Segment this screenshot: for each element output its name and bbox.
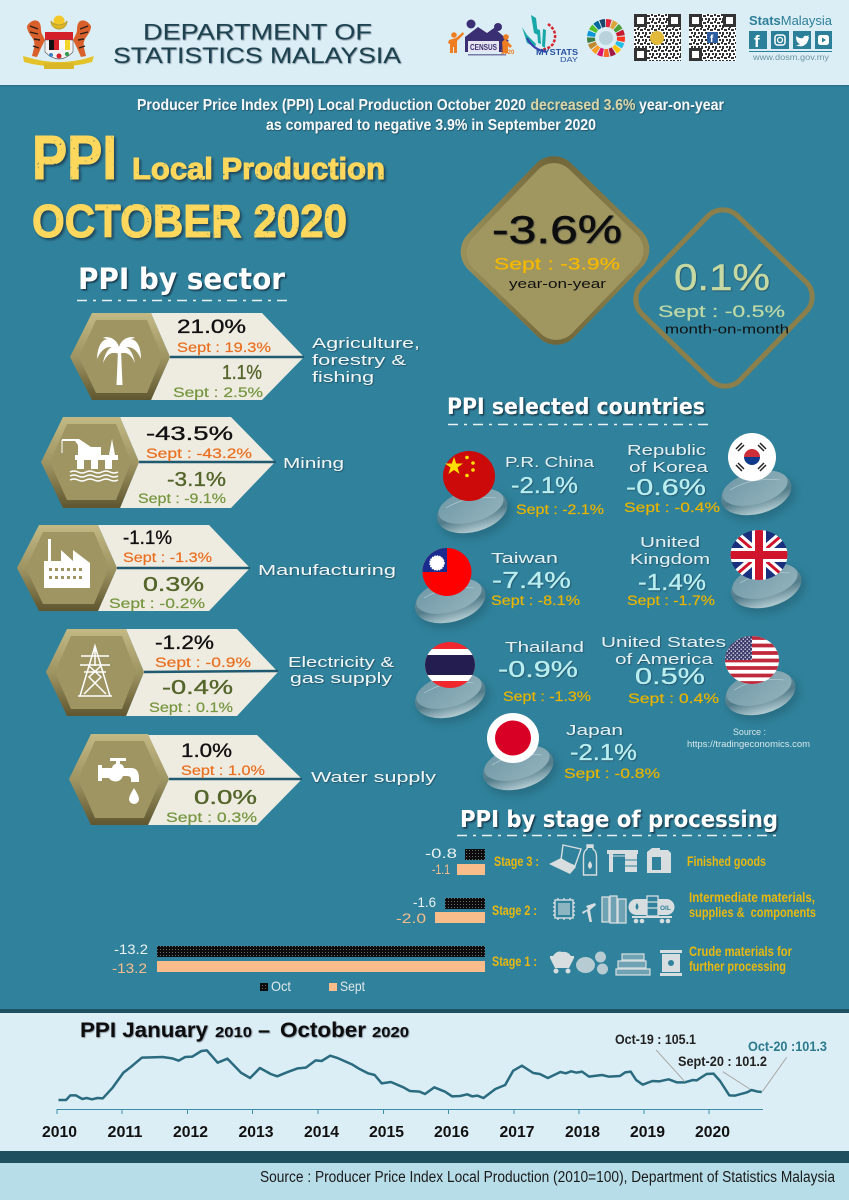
agriculture label: forestry & xyxy=(312,352,406,369)
hexagon and tap icon xyxy=(69,734,302,825)
x axis xyxy=(57,1109,763,1114)
water values: Sept : 0.3% xyxy=(166,810,257,825)
country: taiwan: Taiwan xyxy=(491,550,558,567)
mining values: Sept : -9.1% xyxy=(138,491,226,506)
flag: china xyxy=(443,451,495,501)
statsmalaysia social block: www.dosm.gov.my xyxy=(752,52,830,62)
manufacturing label: Manufacturing xyxy=(258,562,396,579)
year labels: 2011 xyxy=(108,1124,143,1141)
chart annotations: Oct-19 : 105.1 xyxy=(615,1031,696,1047)
agriculture values: 21.0% xyxy=(177,317,246,338)
legend xyxy=(260,978,365,994)
header title: DEPARTMENT OF xyxy=(143,20,372,44)
statsmalaysia social block xyxy=(749,13,833,62)
main title xyxy=(32,124,385,247)
year labels: 2012 xyxy=(173,1124,208,1141)
logo: mystats day: MYSTATS xyxy=(536,47,578,57)
country: taiwan: -7.4% xyxy=(492,567,571,593)
diamond: month-on-month: month-on-month xyxy=(665,322,789,336)
stage labels: Stage 3 : xyxy=(494,854,539,869)
stage labels: Crude materials for xyxy=(689,944,793,959)
icons: stage 1 crude materials xyxy=(550,950,682,976)
agriculture values: 1.1% xyxy=(222,362,262,384)
country: united kingdom xyxy=(628,530,807,615)
year labels: 2016 xyxy=(434,1124,469,1141)
electricity values: -0.4% xyxy=(162,677,233,699)
stage labels: Stage 1 : xyxy=(492,954,537,969)
chart title: 2020 xyxy=(372,1025,409,1041)
ppi line xyxy=(58,1050,787,1100)
diamond: year-on-year: Sept : -3.9% xyxy=(494,254,620,274)
electricity values: -1.2% xyxy=(155,633,214,654)
electricity label xyxy=(288,654,394,687)
bar chart: stage of processing: -13.2 xyxy=(114,942,148,957)
logo: sdg wheel xyxy=(591,23,621,53)
country: china: Sept : -2.1% xyxy=(516,502,604,517)
country: taiwan xyxy=(415,548,580,630)
country: china: P.R. China xyxy=(505,454,595,471)
chart annotations xyxy=(615,1031,827,1069)
hexagon and palm icon xyxy=(70,313,304,400)
country: thailand: Thailand xyxy=(505,639,584,656)
country: taiwan: Sept : -8.1% xyxy=(491,593,580,608)
flag: united states xyxy=(724,636,780,684)
country: korea: Republic xyxy=(627,442,707,459)
bar chart: stage of processing: -1.6 xyxy=(413,895,436,910)
bar chart: stage of processing: -0.8 xyxy=(425,846,457,861)
country: japan xyxy=(478,713,660,803)
country: united kingdom: United xyxy=(640,534,700,551)
icons: stage 2 intermediate materials: OIL xyxy=(660,905,671,912)
flag: japan xyxy=(487,713,539,763)
country: korea: -0.6% xyxy=(626,474,706,500)
water values: Sept : 1.0% xyxy=(181,763,265,778)
manufacturing values: 0.3% xyxy=(143,574,204,596)
country: united states: Sept : 0.4% xyxy=(628,691,719,706)
diamond: year-on-year: -3.6% xyxy=(492,209,622,252)
hexagon and oil rig icon xyxy=(41,417,276,508)
agriculture label xyxy=(312,335,420,386)
country: japan: -2.1% xyxy=(570,739,637,765)
country: korea: Sept : -0.4% xyxy=(624,500,720,515)
flag: united kingdom xyxy=(730,530,788,580)
year labels: 2018 xyxy=(565,1124,600,1141)
country: united kingdom: Sept : -1.7% xyxy=(627,593,715,608)
agriculture values: Sept : 19.3% xyxy=(177,340,271,355)
country: united kingdom: Kingdom xyxy=(630,551,710,568)
country: thailand: Sept : -1.3% xyxy=(503,689,591,704)
intro statement: year-on-year xyxy=(639,97,724,114)
logo: census 2020: CENSUS xyxy=(470,43,498,52)
water values xyxy=(166,741,265,825)
main title: OCTOBER 2020 xyxy=(32,195,347,247)
mining values: Sept : -43.2% xyxy=(146,446,252,461)
mining values: -43.5% xyxy=(146,424,233,445)
countries source note: https://tradingeconomics.com xyxy=(687,739,810,750)
heading: ppi selected countries: PPI selected countries xyxy=(447,395,705,420)
country: china xyxy=(432,451,604,546)
stage labels: further processing xyxy=(689,959,786,974)
manufacturing values: -1.1% xyxy=(123,528,172,549)
intro statement: decreased 3.6% xyxy=(530,97,636,114)
sector: manufacturing xyxy=(17,525,396,611)
hexagon and factory icon xyxy=(17,525,250,611)
year labels: 2017 xyxy=(500,1124,534,1141)
diamond: month-on-month xyxy=(627,201,821,395)
year labels: 2014 xyxy=(304,1124,339,1141)
stage labels: supplies & components xyxy=(689,905,816,920)
year labels xyxy=(42,1124,730,1141)
icon: coat of arms xyxy=(23,16,94,69)
chart title: – xyxy=(258,1019,270,1042)
panel: line chart xyxy=(0,1013,849,1151)
main title: PPI xyxy=(32,124,117,193)
country: thailand: -0.9% xyxy=(498,656,578,682)
statsmalaysia social block: f xyxy=(754,32,760,51)
logo: census 2020 xyxy=(448,20,515,56)
dark strip above chart xyxy=(0,1009,849,1013)
electricity values: Sept : 0.1% xyxy=(149,700,233,715)
year labels: 2015 xyxy=(369,1124,404,1141)
qr code 1 xyxy=(634,14,681,61)
agriculture label: fishing xyxy=(312,369,374,386)
header title: STATISTICS MALAYSIA xyxy=(113,43,401,68)
hexagon and pylon icon xyxy=(46,629,278,716)
manufacturing values: Sept : -0.2% xyxy=(109,596,205,611)
sector: water xyxy=(69,734,437,825)
legend: Sept xyxy=(340,978,365,994)
mining label: Mining xyxy=(283,455,344,472)
country: japan: Sept : -0.8% xyxy=(564,766,660,781)
chart title xyxy=(80,1019,409,1042)
chart title: 2010 xyxy=(215,1025,252,1041)
header band xyxy=(0,0,849,86)
year labels: 2013 xyxy=(238,1124,274,1141)
electricity values: Sept : -0.9% xyxy=(155,655,251,670)
header title xyxy=(113,20,401,68)
diamond: month-on-month: 0.1% xyxy=(674,257,770,298)
electricity label: gas supply xyxy=(290,670,393,687)
electricity values xyxy=(149,633,251,715)
statsmalaysia social block: StatsMalaysia xyxy=(749,13,833,28)
countries source note xyxy=(687,727,810,750)
qr code 2: f xyxy=(710,34,714,45)
country: united states: United States xyxy=(601,634,726,651)
diamond: month-on-month: Sept : -0.5% xyxy=(658,302,785,321)
bar chart: stage of processing: -1.1 xyxy=(432,862,450,877)
logo: mystats day xyxy=(522,15,578,64)
dark strip below chart xyxy=(0,1151,849,1163)
water label: Water supply xyxy=(311,769,437,786)
icons: stage 3 finished goods xyxy=(549,845,671,875)
country: united states xyxy=(602,636,801,722)
flag: taiwan xyxy=(422,548,472,596)
intro statement: as compared to negative 3.9% in September 2020 xyxy=(266,117,596,134)
countries source note: Source : xyxy=(733,727,766,738)
chart annotations: Sept-20 : 101.2 xyxy=(678,1053,767,1069)
year labels: 2019 xyxy=(630,1124,665,1141)
agriculture values xyxy=(173,317,271,400)
country: china: -2.1% xyxy=(511,472,578,498)
logo: census 2020: 2020 xyxy=(501,50,515,56)
year labels: 2020 xyxy=(695,1124,730,1141)
year labels: 2010 xyxy=(42,1124,77,1141)
country: thailand xyxy=(415,641,590,725)
chart title: PPI January xyxy=(80,1019,208,1042)
stage labels: Finished goods xyxy=(687,854,766,869)
country: japan: Japan xyxy=(566,722,623,739)
country: united states: of America xyxy=(615,651,714,668)
chart annotations: Oct-20 :101.3 xyxy=(748,1038,827,1054)
heading: ppi by stage of processing: PPI by stage of processing xyxy=(460,807,778,833)
intro statement xyxy=(137,97,724,134)
flag: korea xyxy=(728,433,776,481)
water values: 0.0% xyxy=(194,787,257,809)
chart title: October xyxy=(280,1019,366,1042)
diamond: year-on-year xyxy=(450,146,660,355)
mining values xyxy=(138,424,252,506)
agriculture values: Sept : 2.5% xyxy=(173,385,263,400)
heading: ppi by sector: PPI by sector xyxy=(78,262,286,296)
bar chart: stage of processing: -13.2 xyxy=(112,961,147,976)
agriculture label: Agriculture, xyxy=(312,335,420,352)
water values: 1.0% xyxy=(181,741,232,762)
sector: mining xyxy=(41,417,344,508)
country: korea xyxy=(624,433,801,528)
intro statement: Producer Price Index (PPI) Local Production October 2020 xyxy=(137,97,526,114)
footer source xyxy=(0,1163,849,1200)
mining values: -3.1% xyxy=(167,469,226,491)
flag: thailand xyxy=(424,641,476,689)
manufacturing values: Sept : -1.3% xyxy=(123,550,212,565)
stage labels: Stage 2 : xyxy=(492,903,537,918)
country: united states: 0.5% xyxy=(635,663,705,689)
bar chart: stage of processing xyxy=(112,846,485,994)
bar chart: stage of processing: -2.0 xyxy=(396,911,426,926)
country: united kingdom: -1.4% xyxy=(638,569,706,595)
stage labels xyxy=(492,854,816,974)
country: korea: of Korea xyxy=(629,459,709,476)
icons: stage 2 intermediate materials xyxy=(553,896,674,923)
sector: agriculture xyxy=(70,313,420,400)
manufacturing values xyxy=(109,528,212,611)
logo: mystats day: DAY xyxy=(560,55,578,64)
electricity label: Electricity & xyxy=(288,654,394,671)
legend: Oct xyxy=(271,978,291,994)
stage labels: Intermediate materials, xyxy=(689,890,815,905)
diamond: year-on-year: year-on-year xyxy=(509,277,606,291)
main title: Local Production xyxy=(132,151,385,186)
sector: electricity xyxy=(46,629,394,716)
qr code 2 xyxy=(689,14,736,61)
